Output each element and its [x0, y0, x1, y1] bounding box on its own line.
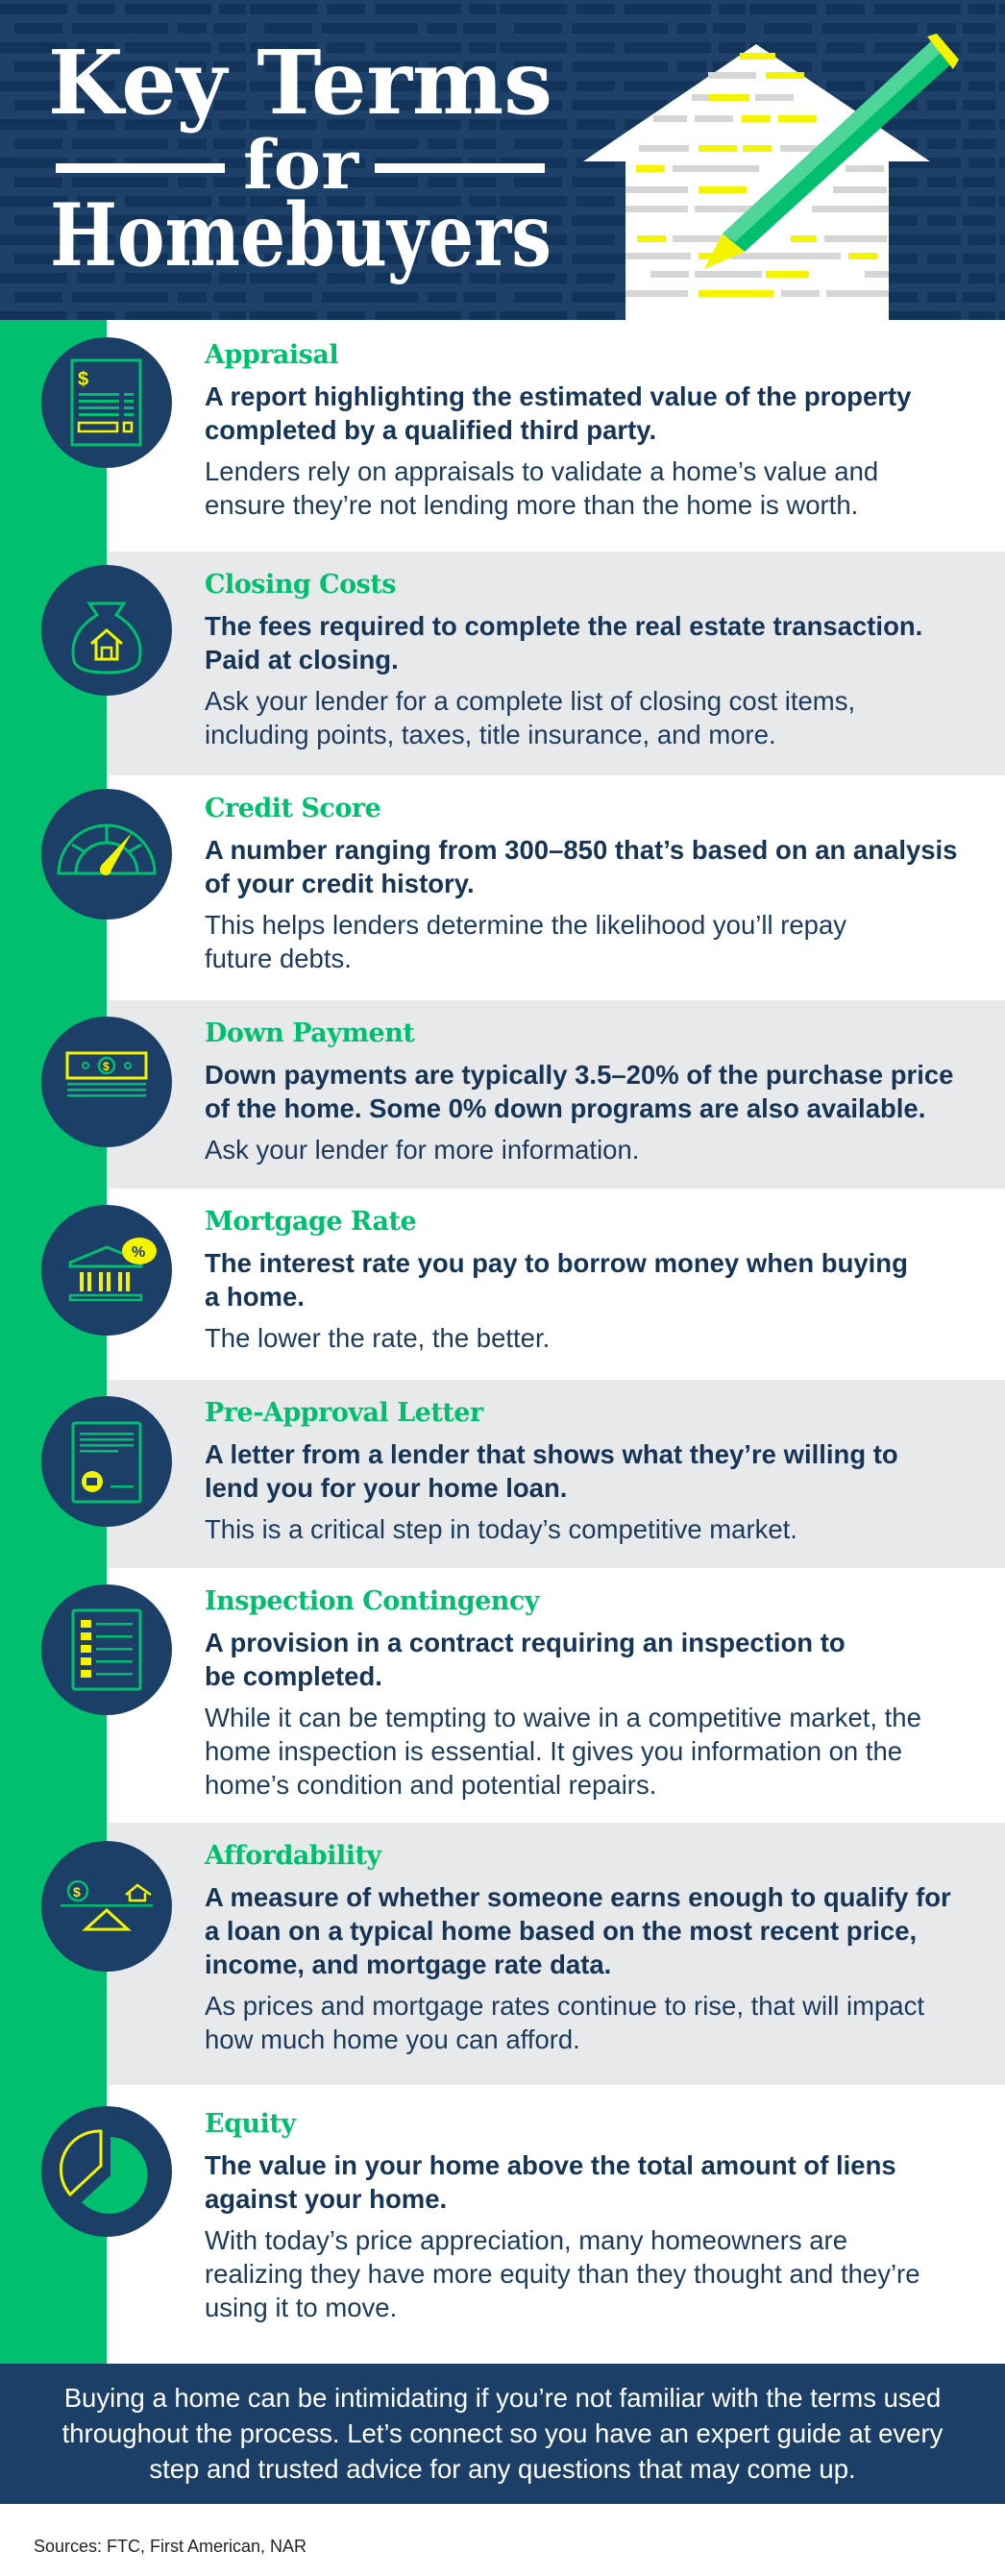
- text: affordability: income, and mortgage rate data.: [205, 1950, 611, 1979]
- text: appraisal: Lenders rely on appraisals to validate a home’s value and: [205, 456, 878, 486]
- text: affordability: Affordability: [205, 1841, 381, 1871]
- text: inspection contingency: Inspection Contingency: [205, 1586, 539, 1616]
- text: credit score: Credit Score: [205, 794, 380, 823]
- icon: scale: [41, 1841, 172, 1972]
- text: credit score: This helps lenders determine the likelihood you’ll repay: [205, 910, 846, 940]
- text: appraisal: ensure they’re not lending more than the home is worth.: [205, 490, 858, 520]
- text: credit score: A number ranging from 300–850 that’s based on an analysis: [205, 835, 957, 865]
- text: closing costs: [205, 570, 922, 749]
- icon: gauge: [41, 789, 172, 920]
- text: equity: With today’s price appreciation, many homeowners are: [205, 2225, 847, 2255]
- text: affordability: As prices and mortgage rates continue to rise, that will impact: [205, 1991, 924, 2021]
- panel: closing costs: [0, 552, 1005, 775]
- panel: affordability: [0, 1823, 1005, 2085]
- text: credit score: future debts.: [205, 944, 352, 973]
- text: pre-approval letter: Pre-Approval Letter: [205, 1398, 483, 1428]
- title: [48, 31, 552, 286]
- icon: bank with percent: [41, 1205, 172, 1336]
- text: down payment: Down Payment: [205, 1018, 414, 1048]
- panel: mortgage rate: [41, 1205, 908, 1353]
- text: closing costs: including points, taxes, title insurance, and more.: [205, 720, 776, 749]
- text: down payment: [205, 1018, 953, 1165]
- text: closing costs: Paid at closing.: [205, 645, 399, 675]
- text: inspection contingency: [205, 1586, 921, 1800]
- text: closing costs: Closing Costs: [205, 570, 396, 600]
- text: down payment: Ask your lender for more information.: [205, 1135, 639, 1165]
- icon: appraisal document: [41, 337, 172, 468]
- text: pre-approval letter: This is a critical step in today’s competitive market.: [205, 1514, 797, 1544]
- text: pre-approval letter: [205, 1398, 898, 1544]
- text: appraisal: completed by a qualified third party.: [205, 415, 656, 445]
- text: inspection contingency: be completed.: [205, 1661, 382, 1691]
- text: affordability: [204, 1841, 951, 2054]
- icon: cash: $: [103, 1060, 110, 1073]
- text: credit score: [205, 794, 957, 973]
- text: closing costs: The fees required to complete the real estate transaction.: [205, 611, 922, 641]
- icon: cash: [41, 1017, 172, 1147]
- icon: bank with percent: %: [132, 1244, 145, 1261]
- text: equity: using it to move.: [205, 2293, 397, 2322]
- text: credit score: of your credit history.: [205, 869, 475, 898]
- icon: scale: $: [73, 1884, 81, 1900]
- panel: pre-approval letter: [0, 1380, 1005, 1568]
- header: [0, 0, 1005, 320]
- panel: credit score: [41, 789, 957, 973]
- text: inspection contingency: While it can be tempting to waive in a competitive market, the: [205, 1703, 921, 1732]
- text: down payment: Down payments are typically 3.5–20% of the purchase price: [205, 1060, 953, 1090]
- footer callout: Buying a home can be intimidating if you’re not familiar with the terms used: [64, 2383, 941, 2413]
- footer callout: throughout the process. Let’s connect so you have an expert guide at every: [62, 2418, 943, 2448]
- text: down payment: of the home. Some 0% down programs are also available.: [205, 1093, 925, 1123]
- text: closing costs: Ask your lender for a complete list of closing cost items,: [205, 686, 855, 716]
- text: affordability: a loan on a typical home based on the most recent price,: [205, 1916, 917, 1946]
- panel: down payment: [0, 1000, 1005, 1189]
- icon: appraisal document: $: [78, 369, 88, 390]
- text: mortgage rate: The interest rate you pay to borrow money when buying: [205, 1248, 908, 1278]
- text: appraisal: A report highlighting the estimated value of the property: [205, 381, 911, 411]
- icon: pie chart: [41, 2106, 172, 2237]
- text: appraisal: [204, 340, 911, 520]
- icon: checklist: [41, 1584, 172, 1715]
- panel: inspection contingency: [41, 1584, 921, 1800]
- text: mortgage rate: The lower the rate, the better.: [205, 1323, 550, 1353]
- icon: letter: [41, 1396, 172, 1527]
- footer callout: [0, 2364, 1005, 2504]
- text: mortgage rate: [205, 1207, 908, 1353]
- text: pre-approval letter: lend you for your home loan.: [205, 1473, 567, 1503]
- green side strip: [0, 320, 107, 2364]
- icon: house with pencil: [583, 34, 959, 320]
- panel: appraisal: [41, 337, 911, 520]
- text: equity: against your home.: [205, 2184, 447, 2214]
- text: equity: Equity: [205, 2109, 296, 2139]
- text: equity: [205, 2109, 920, 2322]
- text: inspection contingency: A provision in a contract requiring an inspection to: [205, 1628, 846, 1657]
- text: affordability: A measure of whether someone earns enough to qualify for: [205, 1882, 951, 1912]
- panel: equity: [41, 2106, 920, 2322]
- text: mortgage rate: a home.: [205, 1282, 305, 1312]
- text: equity: realizing they have more equity than they thought and they’re: [205, 2259, 920, 2289]
- text: pre-approval letter: A letter from a lender that shows what they’re willing to: [205, 1439, 898, 1469]
- text: equity: The value in your home above the total amount of liens: [205, 2150, 896, 2180]
- icon: money bag: [41, 565, 172, 696]
- text: inspection contingency: home inspection is essential. It gives you information on the: [205, 1736, 902, 1766]
- text: appraisal: Appraisal: [205, 340, 338, 370]
- title: Homebuyers: [50, 184, 552, 286]
- text: mortgage rate: Mortgage Rate: [205, 1207, 416, 1237]
- text: inspection contingency: home’s condition and potential repairs.: [205, 1770, 656, 1800]
- title: Key Terms: [48, 31, 552, 135]
- sources: Sources: FTC, First American, NAR: [34, 2537, 306, 2556]
- text: affordability: how much home you can afford.: [205, 2024, 580, 2054]
- title: for: [243, 125, 359, 205]
- footer callout: step and trusted advice for any questions that may come up.: [149, 2454, 856, 2484]
